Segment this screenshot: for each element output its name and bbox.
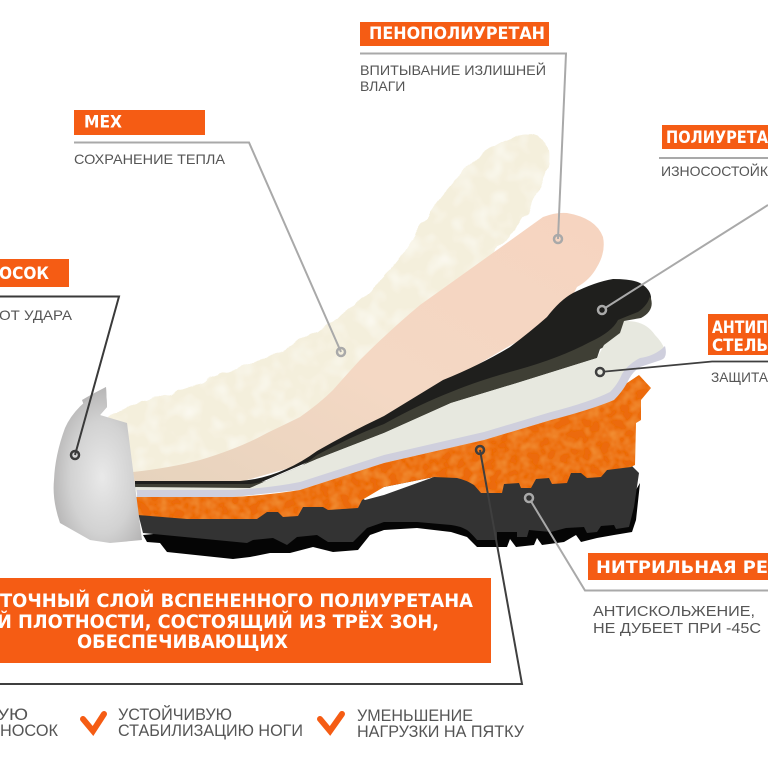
arch gap bbox=[362, 477, 434, 500]
leader line bbox=[74, 142, 341, 352]
callout: ПОЛИУРЕТАН bbox=[598, 125, 768, 314]
icon: check mark 2 bbox=[320, 714, 342, 731]
layer: steel toe cap bbox=[54, 387, 142, 543]
marker bbox=[525, 494, 533, 502]
description: ВЛАГИ bbox=[360, 78, 405, 94]
callout: ПЕНОПОЛИУРЕТАН bbox=[360, 22, 566, 243]
heading: НИТРИЛЬНАЯ РЕ bbox=[596, 558, 768, 578]
leader line bbox=[0, 296, 119, 455]
layer: nitrile rubber outsole shadow bbox=[143, 483, 640, 559]
label box bbox=[0, 259, 69, 287]
marker bbox=[598, 306, 606, 314]
layer: black polyurethane bbox=[135, 279, 651, 487]
heading: ПЕНОПОЛИУРЕТАН bbox=[369, 24, 545, 44]
benefit 1: НОСОК bbox=[0, 721, 58, 740]
icon: check mark 1 bbox=[83, 714, 104, 731]
marker bbox=[554, 235, 562, 243]
marker bbox=[596, 368, 604, 376]
banner text: ОБЕСПЕЧИВАЮЩИХ bbox=[77, 631, 288, 653]
description: ВПИТЫВАНИЕ ИЗЛИШНЕЙ bbox=[360, 61, 546, 78]
callout: НОСОК bbox=[0, 259, 119, 459]
benefit 3: УМЕНЬШЕНИЕ bbox=[357, 706, 473, 725]
banner text: ТОЧНЫЙ СЛОЙ ВСПЕНЕННОГО ПОЛИУРЕТАНА bbox=[0, 589, 473, 612]
marker bbox=[71, 451, 79, 459]
marker bbox=[337, 348, 345, 356]
layer: black polyurethane edge bbox=[135, 296, 652, 488]
benefit 3: НАГРУЗКИ НА ПЯТКУ bbox=[357, 722, 524, 741]
label box bbox=[662, 125, 768, 149]
layer: foam polyurethane bbox=[133, 213, 604, 484]
layer: fur bbox=[108, 133, 548, 485]
benefit 2: УСТОЙЧИВУЮ bbox=[118, 705, 232, 724]
layer: anti-puncture insole bbox=[135, 321, 665, 494]
layer: orange polyurethane midsole bbox=[136, 375, 651, 519]
label box bbox=[360, 22, 549, 46]
leader line bbox=[600, 362, 768, 372]
banner background bbox=[0, 578, 491, 663]
callout: АНТИПРОКОЛЬНАЯ СТЕЛЬКА bbox=[596, 314, 768, 385]
callout: НИТРИЛЬНАЯ РЕЗИНА bbox=[525, 494, 768, 637]
leader line: midsole to banner bbox=[0, 446, 522, 684]
heading: МЕХ bbox=[84, 112, 122, 132]
label box bbox=[708, 314, 768, 355]
description: ИЗНОСОСТОЙК bbox=[661, 162, 768, 179]
layer: lavender edge bbox=[137, 346, 666, 497]
banner text: Й ПЛОТНОСТИ, СОСТОЯЩИЙ ИЗ ТРЁХ ЗОН, bbox=[0, 609, 439, 633]
banner: midsole description bbox=[0, 578, 491, 663]
layer: nitrile rubber outsole bbox=[138, 465, 639, 545]
leader line bbox=[529, 498, 768, 590]
description: ОТ УДАРА bbox=[0, 307, 73, 323]
benefit 2: СТАБИЛИЗАЦИЮ НОГИ bbox=[118, 721, 303, 740]
callout: МЕХ bbox=[74, 110, 345, 356]
description: АНТИСКОЛЬЖЕНИЕ, bbox=[593, 603, 755, 620]
leader line bbox=[602, 158, 768, 310]
heading: ОСОК bbox=[0, 264, 49, 284]
label box bbox=[588, 553, 768, 580]
description: ЗАЩИТА bbox=[711, 369, 768, 385]
marker bbox=[476, 446, 484, 454]
leader line bbox=[360, 54, 566, 239]
description: НЕ ДУБЕЕТ ПРИ -45С bbox=[593, 620, 761, 637]
description: СОХРАНЕНИЕ ТЕПЛА bbox=[74, 151, 226, 167]
label box bbox=[74, 110, 205, 135]
insole illustration: exploded shoe layers bbox=[54, 133, 666, 559]
